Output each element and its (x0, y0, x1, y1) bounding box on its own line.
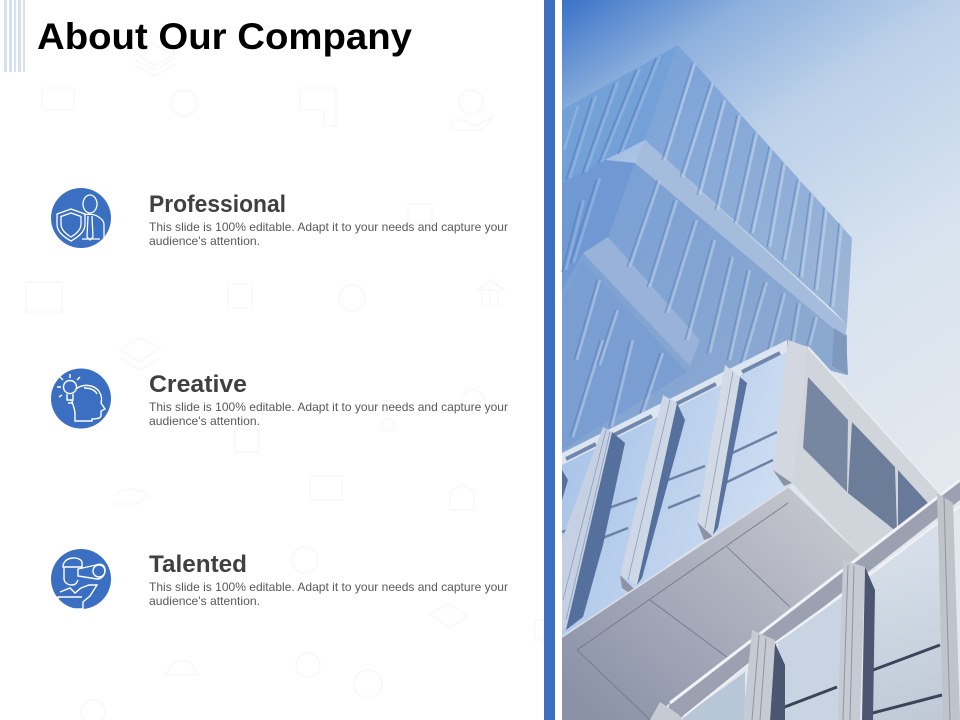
title: About Our Company (37, 16, 412, 57)
third tier slab (583, 237, 700, 366)
description: audience's attention. (149, 414, 260, 428)
railing band (665, 481, 960, 720)
second tier left face (562, 160, 635, 290)
item: Creative (51, 368, 508, 428)
description: This slide is 100% editable. Adapt it to your needs and capture your (149, 580, 508, 594)
description: audience's attention. (149, 234, 260, 248)
mullions (562, 432, 777, 543)
decorative stripes block (4, 0, 25, 72)
top tier left face (562, 45, 678, 183)
lower right glass with railing and columns (650, 480, 960, 720)
sky (562, 0, 960, 720)
heading: Professional (149, 191, 286, 218)
heading: Talented (149, 551, 247, 578)
faint background icons (26, 44, 544, 720)
blue vertical bar (544, 0, 555, 720)
photo: office building against the sky (562, 0, 960, 720)
dark fin shadows (566, 432, 625, 630)
dark mullions (782, 645, 942, 715)
description: This slide is 100% editable. Adapt it to your needs and capture your (149, 400, 508, 414)
tower lower right block (832, 328, 848, 375)
description (149, 580, 508, 608)
description: audience's attention. (149, 594, 260, 608)
heading: Creative (149, 371, 247, 398)
description (149, 220, 508, 248)
slab between tiers (635, 140, 847, 338)
icon: shield and businessman (51, 188, 111, 248)
item: Talented (51, 549, 508, 609)
item: Professional (51, 188, 508, 248)
upper tower tiers (562, 45, 852, 460)
third tier fins (573, 280, 663, 437)
second tier fins (630, 180, 817, 368)
top tier facade (645, 45, 852, 325)
soffit underside (562, 487, 860, 720)
description: This slide is 100% editable. Adapt it to your needs and capture your (149, 220, 508, 234)
second tier body (562, 160, 847, 460)
icon: head with light bulb (51, 368, 111, 428)
description (149, 400, 508, 428)
columns (862, 567, 875, 720)
top tier fins (665, 63, 842, 307)
balcony: box facade with dark windows (792, 347, 937, 555)
balcony: glass and railing (562, 340, 808, 640)
third tier left body (562, 262, 687, 450)
icon: person with telescope (51, 549, 111, 609)
left face fins (564, 56, 660, 270)
light fins (562, 427, 612, 630)
